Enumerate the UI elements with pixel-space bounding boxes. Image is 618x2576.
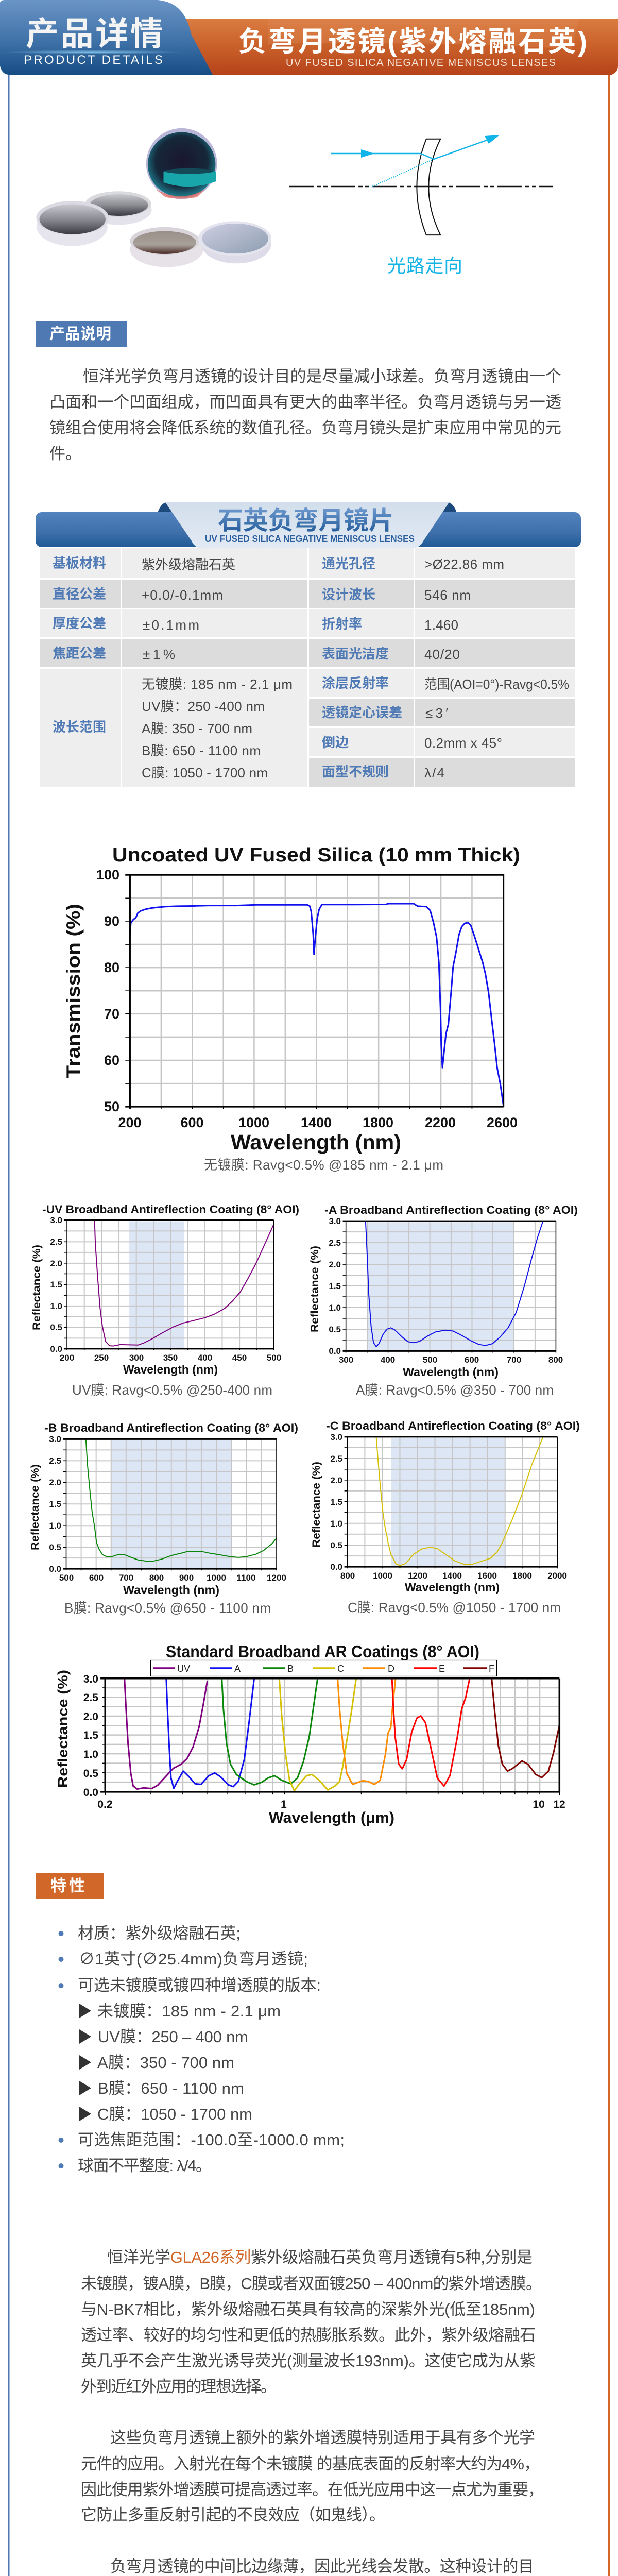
B y labels: 1.0: [49, 1521, 61, 1531]
table left values: ±0.1mm: [143, 617, 199, 633]
combined y labels: 1.5: [83, 1730, 98, 1741]
chart: B coating: [29, 1421, 298, 1616]
virtual ray: [372, 159, 434, 187]
header main title: 负弯月透镜(紫外熔融石英): [238, 26, 587, 57]
feature text: [78, 1924, 345, 2175]
x axis labels: 1000: [238, 1115, 269, 1130]
A x labels: 700: [507, 1355, 521, 1365]
feature text: B膜：650 - 1100 nm: [98, 2079, 244, 2097]
optical axis: [289, 186, 553, 187]
paragraph: UV coating use: 因此使用紫外增透膜可提高透过率。在低光应用中这一点尤为重要，: [81, 2481, 544, 2499]
table left values: [142, 557, 293, 781]
combined x labels: 1: [281, 1799, 287, 1810]
y axis labels: 90: [104, 913, 119, 929]
table left values: +0.0/-0.1mm: [142, 587, 223, 603]
feature text: 可选未镀膜或镀四种增透膜的版本:: [78, 1976, 321, 1994]
paragraph: UV coating use: 元件的应用。入射光在每个未镀膜 的基底表面的反射率大约为4%，: [81, 2455, 540, 2473]
A x title: Wavelength (nm): [403, 1365, 499, 1379]
feature text: C膜：1050 - 1700 nm: [97, 2105, 252, 2123]
B x labels: 900: [179, 1573, 194, 1583]
combined y labels: 3.0: [83, 1673, 98, 1685]
description paragraph: 件。: [49, 445, 81, 463]
B y title: Reflectance (%): [29, 1464, 41, 1550]
table left labels: 直径公差: [53, 586, 106, 602]
x axis title: Wavelength (nm): [231, 1130, 401, 1154]
B title: -B Broadband Antireflection Coating (8° AOI): [44, 1421, 298, 1434]
combined chart plot: [100, 1679, 559, 1795]
UV y labels: 1.0: [50, 1301, 62, 1311]
feature text: 球面不平整度: λ/4。: [78, 2157, 212, 2175]
combined chart title: Standard Broadband AR Coatings (8° AOI): [166, 1642, 479, 1661]
lens: front centre: [130, 227, 203, 267]
UV y labels: 1.5: [50, 1280, 62, 1290]
C y labels: [330, 1432, 342, 1572]
legend: F: [489, 1664, 494, 1674]
C y labels: 1.5: [330, 1497, 342, 1507]
feature text: 未镀膜：185 nm - 2.1 μm: [97, 2002, 281, 2020]
paragraph: UV coating use: [81, 2429, 544, 2524]
combined x labels: 10: [533, 1799, 545, 1810]
specification table: [40, 548, 575, 787]
A title: -A Broadband Antireflection Coating (8° AOI): [324, 1204, 578, 1216]
legend: D: [388, 1664, 394, 1674]
C y title: Reflectance (%): [311, 1462, 322, 1548]
header tab subtitle: PRODUCT DETAILS: [24, 53, 163, 67]
description paragraph: 镜组合使用将会降低系统的数值孔径。负弯月镜头是扩束应用中常见的元: [49, 419, 561, 437]
A x labels: 800: [548, 1355, 563, 1365]
table left values: 紫外级熔融石英: [142, 557, 235, 572]
table left values: UV膜：250 -400 nm: [142, 699, 265, 714]
banner bar: [36, 512, 581, 547]
x axis labels: 200: [118, 1115, 142, 1130]
table left values: B膜: 650 - 1100 nm: [142, 743, 261, 758]
feature text: UV膜：250 – 400 nm: [98, 2028, 248, 2046]
section tag: features: [36, 1873, 104, 1899]
B x labels: 500: [59, 1573, 74, 1583]
C x title: Wavelength (nm): [405, 1581, 500, 1594]
UV y labels: 3.0: [50, 1215, 62, 1225]
lens: front right: [198, 221, 271, 263]
UV plot: [64, 1220, 274, 1350]
B y labels: 2.0: [49, 1478, 61, 1487]
UV x labels: [60, 1353, 281, 1363]
table right labels: 通光孔径: [322, 556, 375, 571]
legend: E: [439, 1664, 445, 1674]
C title: -C Broadband Antireflection Coating (8° AOI): [326, 1419, 580, 1432]
A x labels: [339, 1355, 563, 1365]
description paragraph: [49, 367, 561, 463]
C y labels: 1.0: [330, 1519, 342, 1529]
table right values: 0.2mm x 45°: [424, 735, 502, 751]
UV y labels: [50, 1215, 62, 1354]
UV x labels: 450: [232, 1353, 247, 1363]
B x labels: [59, 1573, 286, 1583]
header band light streak: [268, 19, 579, 49]
legend: UV: [177, 1664, 190, 1674]
paragraph: GLA26 series: 英几乎不会产生激光诱导荧光(测量波长193nm)。这使它成为从紫: [81, 2352, 536, 2370]
table right values: 40/20: [424, 647, 460, 662]
A x labels: 300: [339, 1355, 353, 1365]
table right values: 546 nm: [424, 587, 471, 603]
ray with arrows: [331, 135, 500, 159]
chart caption: 无镀膜: Ravg<0.5% @185 nm - 2.1 μm: [204, 1157, 443, 1173]
x axis labels: 600: [180, 1115, 204, 1130]
A y labels: 3.0: [329, 1216, 341, 1226]
y axis title: Transmission (%): [63, 904, 84, 1078]
B x labels: 1200: [267, 1573, 286, 1583]
C x labels: 1600: [477, 1571, 497, 1581]
table right labels: 透镜定心误差: [322, 705, 402, 720]
B x labels: 1100: [237, 1573, 255, 1583]
banner tab: [165, 502, 449, 548]
A x labels: 400: [381, 1355, 395, 1365]
banner flaps: [158, 502, 457, 513]
B plot: [63, 1439, 277, 1570]
paragraph: GLA26 series: [81, 2248, 542, 2396]
table right values: >Ø22.86 mm: [424, 556, 504, 572]
x axis labels: [118, 1115, 518, 1130]
diagram caption: 光路走向: [387, 255, 462, 276]
feature text: 可选焦距范围：-100.0至-1000.0 mm;: [78, 2131, 345, 2149]
C y labels: 3.0: [330, 1432, 342, 1442]
header orange title band: [185, 19, 618, 75]
C y labels: 2.0: [330, 1476, 342, 1485]
paragraph: GLA26 series: 未镀膜，镀A膜，B膜，C膜或者双面镀250 – 400nm的紫外增透膜。: [81, 2275, 542, 2293]
B x labels: 600: [89, 1573, 104, 1583]
paragraph: GLA26 series: 透过率、较好的均匀性和更低的热膨胀系数。此外，紫外级熔融石: [81, 2326, 536, 2344]
UV x labels: 350: [163, 1353, 178, 1363]
C x labels: 1000: [373, 1571, 392, 1581]
table left labels: 基板材料: [53, 555, 106, 571]
banner title: 石英负弯月镜片: [218, 507, 394, 535]
table left labels: [53, 555, 106, 735]
table right values: ≤3′: [425, 705, 448, 721]
combined y labels: 1.0: [83, 1749, 98, 1760]
feature list: [59, 1924, 345, 2175]
A x labels: 600: [465, 1355, 479, 1365]
header blue tab: [0, 0, 213, 75]
A y title: Reflectance (%): [309, 1246, 321, 1332]
A plot: [343, 1221, 556, 1353]
UV x labels: 200: [60, 1353, 74, 1363]
table right labels: 设计波长: [322, 587, 375, 602]
UV y labels: 2.5: [50, 1237, 62, 1247]
combined x labels: 0.2: [97, 1799, 113, 1810]
transmission plot: [125, 875, 504, 1109]
section tag: product description: [36, 321, 127, 347]
paragraph: UV coating use: 这些负弯月透镜上额外的紫外增透膜特别适用于具有多个光学: [110, 2429, 535, 2447]
feature text: ∅1英寸(∅25.4mm)负弯月透镜;: [79, 1950, 308, 1968]
table left values: A膜: 350 - 700 nm: [142, 721, 252, 736]
chart: UV coating: [31, 1203, 299, 1398]
UV x title: Wavelength (nm): [123, 1363, 218, 1376]
combined y labels: 0.5: [83, 1768, 98, 1780]
combined y labels: 2.0: [83, 1711, 98, 1723]
paragraph: GLA26 series: 恒洋光学GLA26系列紫外级熔融石英负弯月透镜有5种,分别是: [107, 2248, 533, 2266]
C plot: [345, 1437, 557, 1568]
legend: C: [337, 1664, 344, 1674]
C x labels: 800: [340, 1571, 355, 1581]
B y labels: 0.0: [49, 1564, 61, 1574]
product photo: lenses: [36, 128, 271, 267]
bullets: [59, 1931, 64, 2168]
paragraph: UV coating use: 它防止多重反射引起的不良效应（如鬼线）。: [81, 2506, 385, 2524]
section tag: features: 特性: [50, 1877, 85, 1895]
C x labels: [340, 1571, 567, 1581]
C x labels: 2000: [547, 1571, 567, 1581]
y axis labels: 80: [104, 960, 119, 975]
A y labels: 0.5: [329, 1325, 341, 1334]
spec banner: [36, 502, 581, 548]
table right labels: 折射率: [322, 616, 362, 632]
feature text: 材质：紫外级熔融石英;: [78, 1924, 241, 1942]
combined x labels: [97, 1799, 565, 1810]
x axis labels: 2600: [487, 1115, 518, 1130]
table left labels: 波长范围: [53, 719, 106, 735]
triangle markers: [79, 2004, 91, 2121]
UV x labels: 250: [94, 1353, 109, 1363]
UV y labels: 2.0: [50, 1259, 62, 1268]
C caption: C膜: Ravg<0.5% @1050 - 1700 nm: [348, 1600, 561, 1615]
y axis labels: 60: [104, 1053, 119, 1068]
table cells: [40, 548, 575, 787]
UV x labels: 500: [267, 1353, 281, 1363]
x axis labels: 2200: [425, 1115, 456, 1130]
B x labels: 1000: [207, 1573, 226, 1583]
y axis labels: 70: [104, 1006, 119, 1022]
UV x labels: 400: [198, 1353, 212, 1363]
lens: rear left: [84, 191, 152, 225]
chart: standard broadband AR coatings: [55, 1642, 565, 1826]
B x labels: 800: [149, 1573, 164, 1583]
table right labels: 涂层反射率: [322, 675, 389, 691]
A caption: A膜: Ravg<0.5% @350 - 700 nm: [356, 1382, 554, 1398]
table right labels: [322, 556, 402, 779]
UV caption: UV膜: Ravg<0.5% @250-400 nm: [72, 1382, 272, 1398]
UV x labels: 300: [129, 1353, 144, 1363]
chart: C coating: [311, 1419, 580, 1615]
legend: B: [287, 1664, 294, 1674]
C y labels: 0.5: [330, 1540, 342, 1550]
combined y labels: [83, 1673, 98, 1799]
section tag: product description: 产品说明: [49, 326, 111, 343]
description paragraph: 恒洋光学负弯月透镜的设计目的是尽量减小球差。负弯月透镜由一个: [83, 367, 561, 385]
paragraph: design purpose: 负弯月透镜的中间比边缘薄，因此光线会发散。这种设计的目: [110, 2557, 534, 2575]
C x labels: 1800: [512, 1571, 532, 1581]
y axis labels: 100: [96, 867, 119, 883]
y axis labels: 50: [104, 1099, 119, 1114]
UV title: -UV Broadband Antireflection Coating (8° AOI): [42, 1203, 299, 1216]
header english title: UV FUSED SILICA NEGATIVE MENISCUS LENSES: [286, 57, 556, 69]
B x title: Wavelength (nm): [123, 1583, 219, 1597]
A y labels: 1.0: [329, 1303, 341, 1313]
light path diagram: [289, 135, 553, 276]
x axis labels: 1400: [301, 1115, 332, 1130]
lens: coated upright: [146, 128, 217, 199]
A y labels: 0.0: [329, 1346, 341, 1356]
B caption: B膜: Ravg<0.5% @650 - 1100 nm: [64, 1600, 271, 1616]
table left values: 无镀膜: 185 nm - 2.1 μm: [142, 676, 293, 692]
paragraph: GLA26 series: 外到近红外应用的理想选择。: [81, 2378, 277, 2396]
B y labels: 2.5: [49, 1456, 61, 1466]
combined y title: Reflectance (%): [55, 1670, 71, 1788]
table right values: 1.460: [424, 617, 458, 633]
combined y labels: 2.5: [83, 1692, 98, 1704]
B x labels: 700: [119, 1573, 133, 1583]
B y labels: [49, 1434, 61, 1574]
banner subtitle: UV FUSED SILICA NEGATIVE MENISCUS LENSES: [205, 534, 415, 544]
table left values: C膜: 1050 - 1700 nm: [142, 765, 268, 781]
combined x labels: 12: [553, 1799, 565, 1810]
table left values: ±1%: [143, 647, 175, 662]
table right labels: 倒边: [322, 735, 349, 750]
chart: uncoated UV fused silica transmission: [63, 844, 520, 1173]
A y labels: [329, 1216, 341, 1356]
C x labels: 1200: [408, 1571, 427, 1581]
y axis labels: [96, 867, 119, 1114]
header glow line: [2, 50, 183, 54]
table right labels: 面型不规则: [322, 764, 389, 779]
B y labels: 3.0: [49, 1434, 61, 1444]
combined x title: Wavelength (μm): [269, 1809, 394, 1826]
A y labels: 2.0: [329, 1260, 341, 1269]
meniscus lens outline: [417, 139, 440, 235]
A x labels: 500: [423, 1355, 437, 1365]
UV y labels: 0.5: [50, 1323, 62, 1332]
A y labels: 1.5: [329, 1281, 341, 1291]
feature text: A膜：350 - 700 nm: [97, 2054, 234, 2072]
UV y title: Reflectance (%): [31, 1245, 43, 1330]
table right values: λ/4: [424, 765, 444, 781]
header banner: [0, 0, 618, 75]
combined y labels: 0.0: [83, 1787, 98, 1799]
legend: A: [234, 1664, 241, 1674]
table right values: [424, 556, 569, 781]
chart title: Uncoated UV Fused Silica (10 mm Thick): [112, 844, 520, 866]
B y labels: 0.5: [49, 1543, 61, 1552]
chart: A coating: [309, 1204, 578, 1398]
B y labels: 1.5: [49, 1499, 61, 1509]
paragraph: GLA26 series: 与N-BK7相比，紫外级熔融石英具有较高的深紫外光(低至185nm): [81, 2300, 535, 2318]
table left labels: 焦距公差: [53, 646, 106, 661]
table right labels: 表面光洁度: [322, 646, 389, 662]
header tab heading: 产品详情: [26, 15, 163, 53]
lens: front left: [36, 201, 109, 246]
C y labels: 2.5: [330, 1454, 342, 1464]
A y labels: 2.5: [329, 1238, 341, 1248]
description paragraph: 凸面和一个凹面组成，而凹面具有更大的曲率半径。负弯月透镜与另一透: [49, 393, 561, 411]
table left labels: 厚度公差: [53, 616, 106, 631]
C x labels: 1400: [442, 1571, 462, 1581]
table right values: 范围(AOI=0°)-Ravg<0.5%: [424, 676, 569, 692]
UV y labels: 0.0: [50, 1344, 62, 1354]
legend: [150, 1660, 496, 1676]
C y labels: 0.0: [330, 1562, 342, 1572]
x axis labels: 1800: [363, 1115, 393, 1130]
